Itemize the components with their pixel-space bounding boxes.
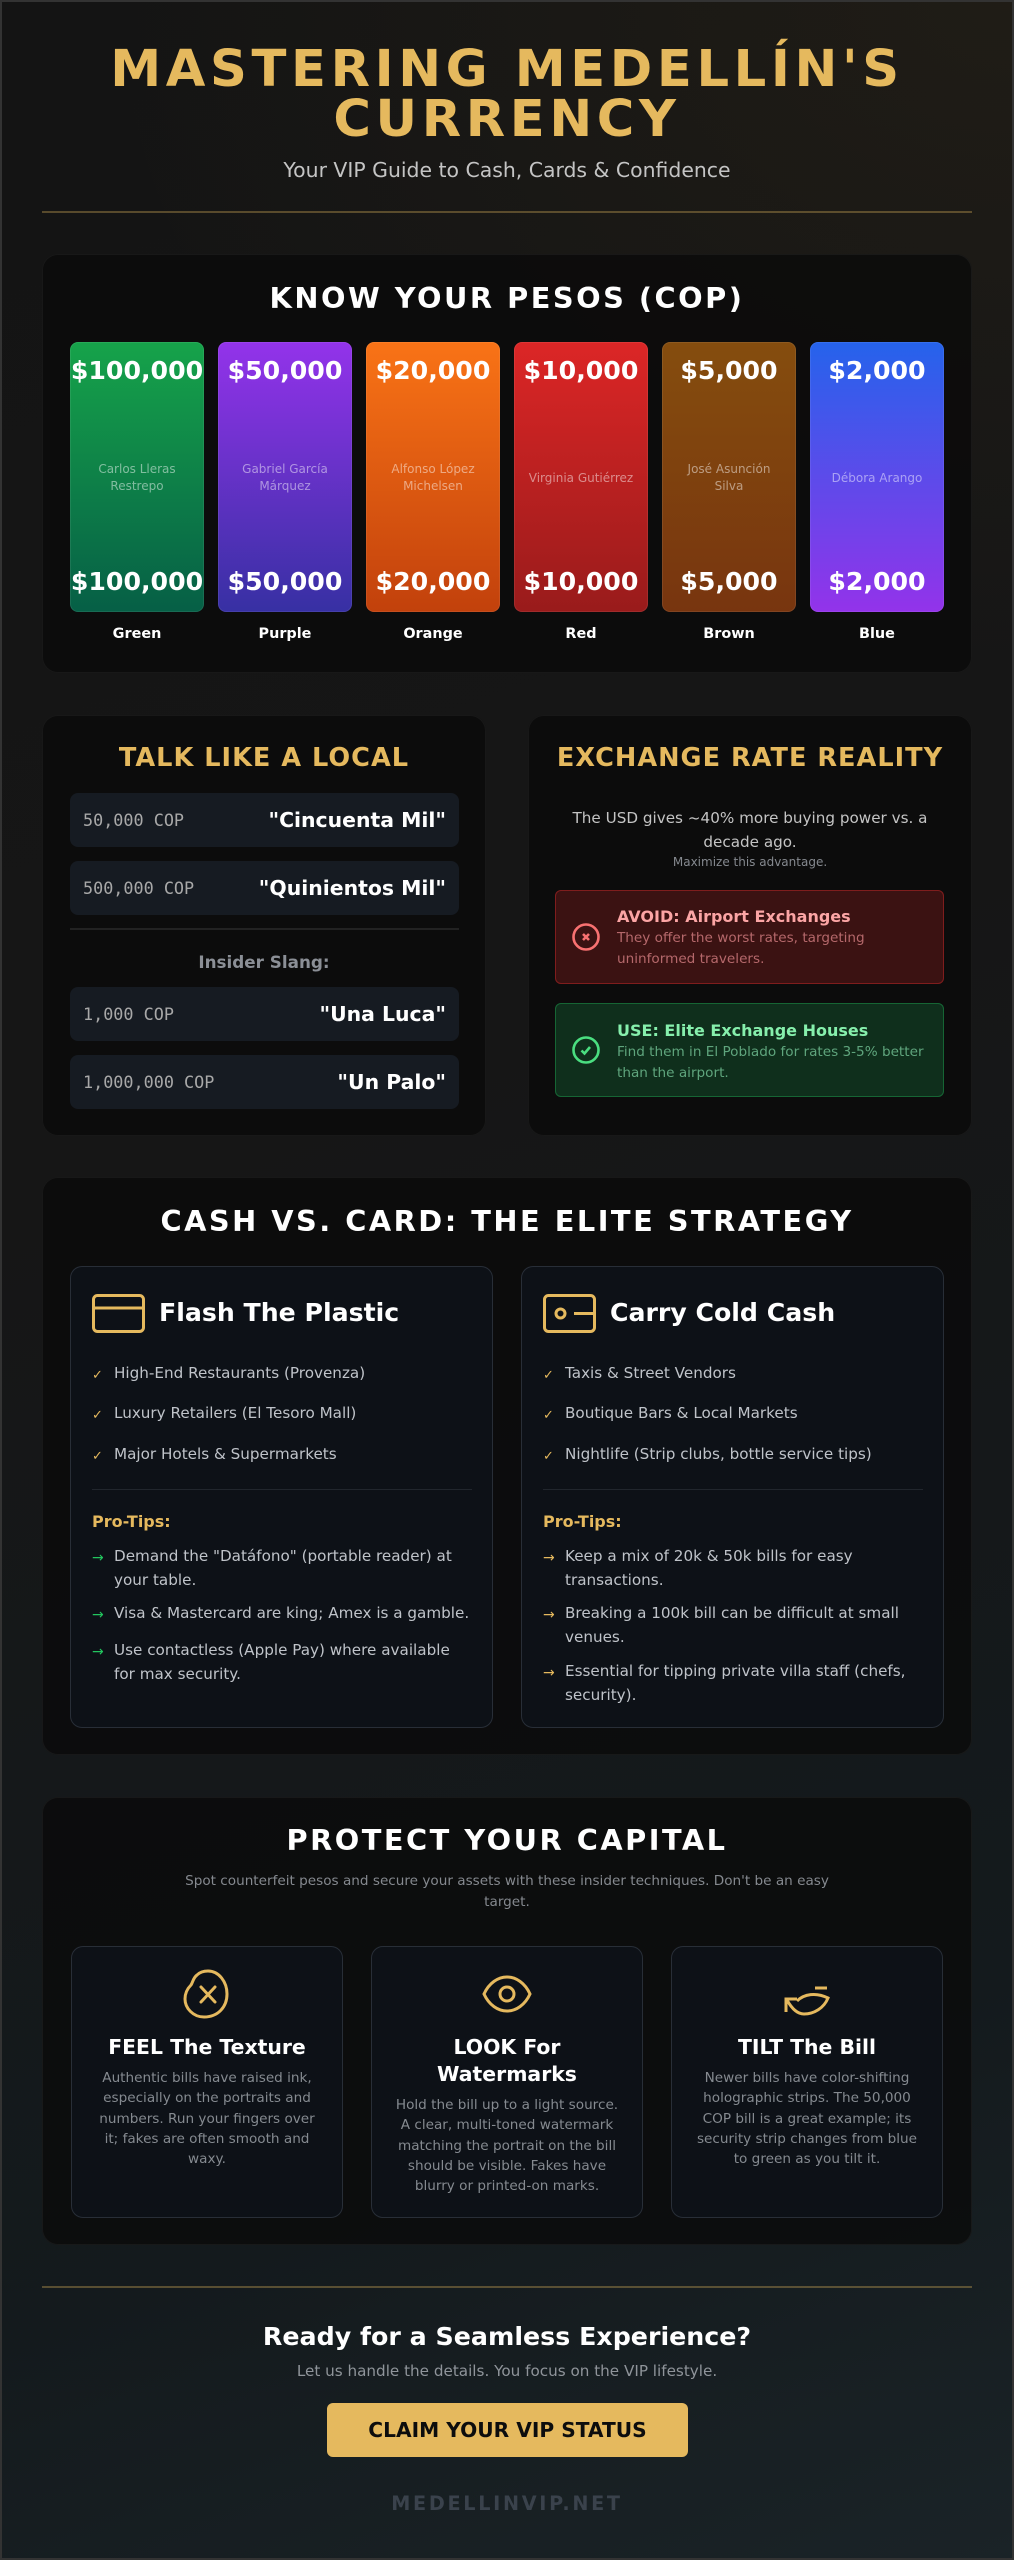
card: tilt the bill: to green as you tilt it. [734,2151,880,2167]
exchange rate note: The USD gives ~40% more buying power vs. a [573,809,927,827]
icon: credit card [92,1294,145,1333]
heading: cash vs card: CASH VS. CARD: THE ELITE STRATEGY [160,1204,854,1238]
banknote: 5,000 brown [662,342,796,612]
card: carry cold cash: ✓ [543,1408,554,1423]
panel: exchange rate reality [528,715,972,1136]
card: tilt the bill [671,1946,943,2218]
banknote: 100,000 green: $100,000 [71,356,203,385]
cta heading: Ready for a Seamless Experience? [263,2322,751,2351]
card: carry cold cash: Breaking a 100k bill can be difficult at small [565,1604,899,1622]
card: carry cold cash: security). [565,1686,636,1704]
card: look for watermarks [371,1946,643,2218]
card: flash the plastic: Luxury Retailers (El Tesoro Mall) [114,1404,356,1422]
colour labels [113,626,895,642]
callout: use elite exchange houses: USE: Elite Exchange Houses [617,1021,868,1040]
banknote: 2,000 blue: $2,000 [828,567,926,596]
exchange rate note: decade ago. [703,833,797,851]
card: carry cold cash: Essential for tipping private villa staff (chefs, [565,1662,906,1680]
icon: cash [543,1294,596,1333]
subtitle: Your VIP Guide to Cash, Cards & Confidence [283,158,731,182]
phrase: cincuenta mil: "Cincuenta Mil" [268,808,446,832]
phrase: quinientos mil: "Quinientos Mil" [259,876,446,900]
card: flash the plastic: ✓ [92,1449,103,1464]
phrase: una luca: 1,000 COP [83,1004,174,1024]
icon: fingerprint x [184,1970,228,2018]
colour labels: Brown [703,626,755,642]
cta subtext: Let us handle the details. You focus on the VIP lifestyle. [297,2362,717,2380]
colour labels: Purple [259,626,311,642]
icon: tilt arrow [784,1986,830,2016]
icon: x circle [572,923,600,951]
callout: avoid airport exchanges: AVOID: Airport Exchanges [617,907,851,926]
intro text: Spot counterfeit pesos and secure your assets with these insider techniques. Don't be an easy [185,1873,829,1889]
intro text: target. [484,1894,530,1910]
banknote: 20,000 orange: $20,000 [376,356,490,385]
intro text [185,1873,829,1910]
banknote: 100,000 green: $100,000 [71,567,203,596]
card: flash the plastic: Demand the "Datáfono" (portable reader) at [114,1547,452,1565]
heading: exchange rate reality: EXCHANGE RATE REALITY [557,743,943,773]
card: tilt the bill: security strip changes from blue [697,2131,917,2147]
card: carry cold cash: → [543,1607,555,1623]
card: carry cold cash: Keep a mix of 20k & 50k bills for easy [565,1547,853,1565]
banknote: 10,000 red [514,342,648,612]
banknote: 100,000 green: Restrepo [110,479,164,493]
card: carry cold cash: Pro-Tips: [543,1512,622,1531]
card: look for watermarks: LOOK For [453,2035,560,2059]
card: feel the texture: waxy. [188,2151,226,2167]
banknote: 100,000 green: Carlos Lleras [98,462,176,476]
title: CURRENCY [333,89,681,149]
banknote: 50,000 purple: Gabriel García [242,462,328,476]
panel: know your pesos [42,254,972,673]
card: flash the plastic: ✓ [92,1408,103,1423]
banknote: 20,000 orange: Alfonso López [391,462,475,476]
card: flash the plastic: your table. [114,1571,196,1589]
banknote: 20,000 orange [366,342,500,612]
phrase: quinientos mil: 500,000 COP [83,878,194,898]
card: tilt the bill: TILT The Bill [738,2035,876,2059]
colour labels: Green [113,626,161,642]
callout: use elite exchange houses: Find them in El Poblado for rates 3-5% better [617,1044,924,1060]
card: flash the plastic: High-End Restaurants (Provenza) [114,1364,365,1382]
phrase: cincuenta mil [70,793,459,847]
banknote: 2,000 blue: Débora Arango [832,470,922,484]
banknote: 10,000 red: $10,000 [524,567,638,596]
panel: talk like a local [42,715,486,1136]
banknote: 50,000 purple: $50,000 [228,567,342,596]
phrase: un palo: "Un Palo" [337,1070,446,1094]
card: tilt the bill: Newer bills have color-shifting [705,2070,909,2086]
heading: talk like a local: TALK LIKE A LOCAL [119,743,409,773]
card: flash the plastic: Major Hotels & Supermarkets [114,1445,337,1463]
card: look for watermarks: A clear, multi-toned watermark [401,2117,613,2133]
banknote: 10,000 red: Virginia Gutiérrez [529,470,633,484]
card: feel the texture: numbers. Run your fingers over [99,2111,315,2127]
card: carry cold cash: ✓ [543,1449,554,1464]
banknote: 50,000 purple: $50,000 [228,356,342,385]
callout: use elite exchange houses [555,1003,944,1097]
card: flash the plastic: Use contactless (Apple Pay) where available [114,1641,450,1659]
card: feel the texture [71,1946,343,2218]
button: claim your vip status: CLAIM YOUR VIP STATUS [368,2418,647,2442]
phrase: cincuenta mil: 50,000 COP [83,810,184,830]
banknote: 50,000 purple [218,342,352,612]
heading: know your pesos: KNOW YOUR PESOS (COP) [270,281,744,315]
banknote: 5,000 brown: José Asunción [688,462,770,476]
banknote: 5,000 brown: $5,000 [680,567,778,596]
banknote: 20,000 orange: Michelsen [403,479,463,493]
phrase: una luca [70,987,459,1041]
card: flash the plastic: → [92,1607,104,1623]
colour labels: Red [565,626,597,642]
website: MEDELLINVIP.NET [391,2492,623,2515]
colour labels: Orange [403,626,463,642]
banknote: 2,000 blue: $2,000 [828,356,926,385]
card: carry cold cash: Carry Cold Cash [610,1298,835,1327]
header [110,38,904,182]
phrase: un palo [70,1055,459,1109]
icon: eye [482,1976,532,2012]
card: tilt the bill: COP bill is a great example; its [703,2111,911,2127]
banknote: 50,000 purple: Márquez [259,479,311,493]
card: carry cold cash: → [543,1665,555,1681]
card: feel the texture: especially on the portraits and [103,2090,311,2106]
card: flash the plastic: ✓ [92,1368,103,1383]
card: flash the plastic: → [92,1550,104,1566]
card: flash the plastic: Visa & Mastercard are king; Amex is a gamble. [114,1604,469,1622]
banknote: 100,000 green [70,342,204,612]
banknote: 5,000 brown: Silva [715,479,743,493]
card: tilt the bill: holographic strips. The 50,000 [703,2090,911,2106]
card: flash the plastic: for max security. [114,1665,241,1683]
colour labels: Blue [859,626,895,642]
panel: protect your capital [42,1797,972,2245]
banknote: 20,000 orange: $20,000 [376,567,490,596]
card: carry cold cash: Nightlife (Strip clubs, bottle service tips) [565,1445,872,1463]
callout: avoid airport exchanges: They offer the worst rates, targeting [617,930,865,946]
card: carry cold cash: transactions. [565,1571,664,1589]
maximize note: Maximize this advantage. [673,855,827,869]
exchange rate note [572,809,927,851]
card: flash the plastic: → [92,1644,104,1660]
card: flash the plastic: Pro-Tips: [92,1512,171,1531]
card: look for watermarks: Hold the bill up to a light source. [396,2097,618,2113]
card: flash the plastic [70,1266,493,1728]
banknote: 5,000 brown: $5,000 [680,356,778,385]
icon: check circle [572,1036,600,1064]
banknote: 10,000 red: $10,000 [524,356,638,385]
card: carry cold cash: Taxis & Street Vendors [565,1364,736,1382]
call to action [263,2322,751,2515]
card: look for watermarks: matching the portrait on the bill [398,2138,616,2154]
button: claim your vip status [327,2403,688,2457]
phrase: quinientos mil [70,861,459,915]
card: flash the plastic: Flash The Plastic [159,1298,399,1327]
title: MASTERING MEDELLÍN'S [110,39,904,99]
card: feel the texture: FEEL The Texture [108,2035,306,2059]
title [110,38,904,149]
card: carry cold cash: ✓ [543,1368,554,1383]
card: look for watermarks: Watermarks [437,2062,577,2086]
card: feel the texture: Authentic bills have raised ink, [102,2070,312,2086]
heading: protect your capital: PROTECT YOUR CAPITAL [286,1823,728,1857]
phrase: una luca: "Una Luca" [319,1002,446,1026]
banknote: 2,000 blue [810,342,944,612]
card: carry cold cash [521,1266,944,1728]
card: look for watermarks: should be visible. Fakes have [408,2158,606,2174]
card: carry cold cash: Boutique Bars & Local Markets [565,1404,798,1422]
card: carry cold cash: venues. [565,1628,625,1646]
insider slang label: Insider Slang: [198,952,330,972]
card: look for watermarks: blurry or printed-on marks. [415,2178,599,2194]
card: carry cold cash: → [543,1550,555,1566]
card: feel the texture: it; fakes are often smooth and [105,2131,309,2147]
callout: use elite exchange houses: than the airport. [617,1064,729,1080]
panel: cash vs card [42,1177,972,1755]
callout: avoid airport exchanges: uninformed travelers. [617,950,764,966]
phrase: un palo: 1,000,000 COP [83,1072,214,1092]
callout: avoid airport exchanges [555,890,944,984]
